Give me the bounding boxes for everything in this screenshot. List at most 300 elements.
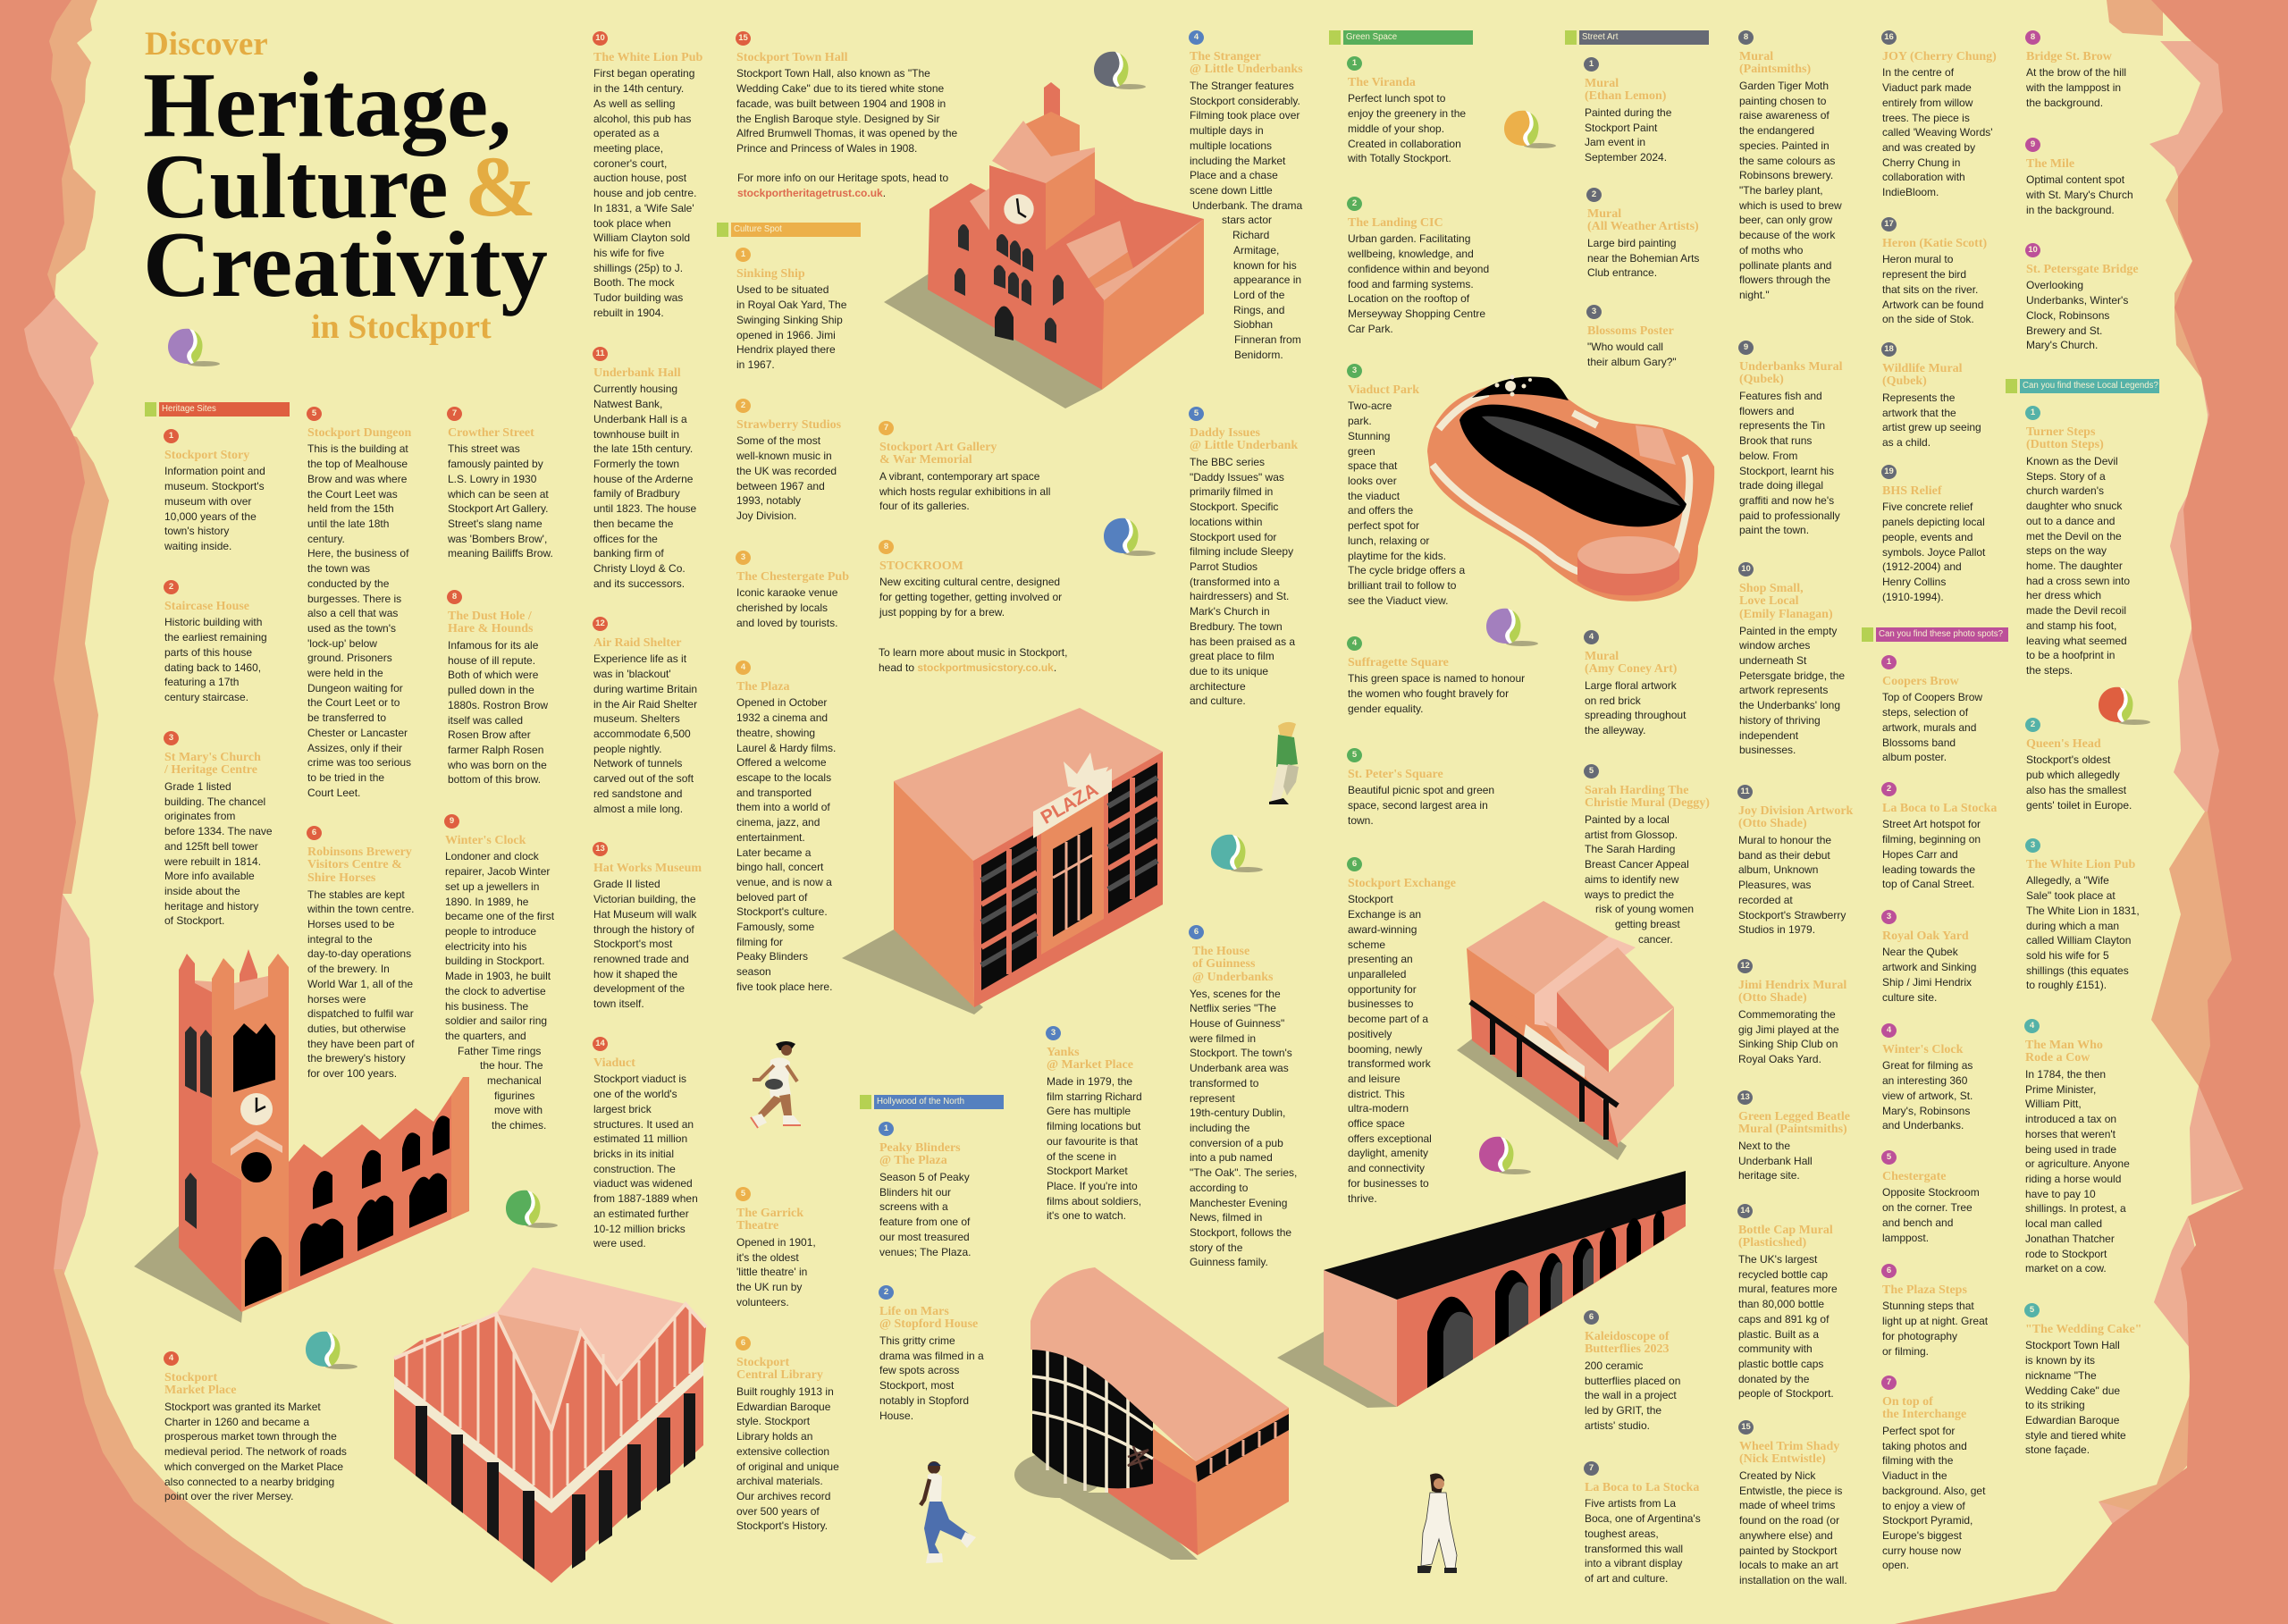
entry: Winter's Clock photo spot: Great for filming as (1882, 1059, 1973, 1072)
section heading: Culture Spot: Culture Spot (734, 224, 782, 234)
entry: Stockport Exchange: positively (1348, 1028, 1392, 1040)
entry: Mural All Weather Artists: 2 (1592, 189, 1596, 199)
entry: St. Petersgate Bridge: Overlooking (2026, 279, 2083, 291)
entry: Mural Paintsmiths: beer, can only grow (1739, 214, 1832, 226)
entry: Winter's Clock photo spot: view of artwork, St. (1882, 1090, 1973, 1102)
entry: The Man Who Rode a Cow: have to pay 10 (2025, 1188, 2096, 1200)
illustration: Stockport Exchange (1457, 901, 1674, 1160)
entry: Green Legged Beatle Mural (1738, 1090, 1850, 1183)
note: heritage link: For more info on our Heritage spots, head to (737, 172, 948, 184)
entry: Sarah Harding mural: Christie Mural (Deggy) (1585, 796, 1710, 810)
entry: The Landing CIC: Location on the rooftop of (1348, 292, 1469, 305)
entry: Stockport Town Hall (736, 31, 957, 155)
entry: Stockport Market Place: 4 (169, 1353, 173, 1363)
entry: Stockport Exchange: and leisure (1348, 1073, 1401, 1085)
entry: The Plaza: Opened in October (736, 696, 827, 709)
entry: Daddy Issues: 5 (1194, 408, 1199, 418)
entry: Viaduct: an estimated further (593, 1207, 689, 1220)
entry: On top of the Interchange: taking photos and (1882, 1440, 1967, 1452)
entry: Shop Small Love Local: Painted in the empty (1739, 625, 1837, 637)
entry: The Chestergate Pub (736, 551, 849, 629)
entry: Stockport Central Library: Built roughly 1913 in (736, 1385, 834, 1398)
entry: Joy Division Artwork (1738, 785, 1853, 938)
entry: The Mile: with St. Mary's Church (2026, 189, 2133, 201)
entry: JOY Cherry Chung: and was created by (1882, 141, 1975, 154)
entry: Stockport Market Place: also connected to a nearby bridging (164, 1476, 334, 1488)
entry: Air Raid Shelter: in the Air Raid Shelter (593, 698, 697, 711)
entry: Suffragette Square: the women who fought bravely for (1348, 687, 1509, 700)
entry: The Plaza Steps: The Plaza Steps (1882, 1283, 1967, 1296)
entry: Air Raid Shelter: carved out of the soft (593, 772, 694, 785)
entry: Mural Paintsmiths: flowers through the (1739, 273, 1830, 286)
entry: Underbank Hall: family of Bradbury (593, 487, 680, 500)
entry: The Garrick Theatre (736, 1187, 816, 1308)
entry: Stockport Exchange: scheme (1348, 938, 1385, 951)
entry: The White Lion Pub legend (2026, 838, 2140, 993)
entry: Daddy Issues: architecture (1190, 680, 1246, 693)
entry: Stockport Town Hall: the English Baroque style. Designed by Sir (736, 113, 939, 125)
entry: Stockport Dungeon: until the late 18th (307, 517, 389, 530)
entry: Chestergate: Opposite Stockroom (1882, 1186, 1980, 1199)
note: music link: head to stockportmusicstory.co.uk. (879, 661, 1056, 674)
entry: Daddy Issues: @ Little Underbank (1190, 439, 1298, 452)
entry: La Boca to La Stocka photo spot: leading towards the (1882, 863, 1975, 876)
entry: Stockport Exchange: businesses to (1348, 997, 1413, 1010)
entry: Wheel Trim Shady: 15 (1741, 1422, 1751, 1432)
entry: Joy Division Artwork: Studios in 1979. (1738, 923, 1815, 936)
entry: Stockport Central Library: over 500 years of (736, 1505, 820, 1518)
entry: Wildlife Mural: artwork that the (1882, 407, 1956, 419)
entry: Green Legged Beatle Mural: heritage site. (1738, 1169, 1800, 1182)
entry: The Stranger: stars actor (1222, 214, 1272, 226)
entry: The Chestergate Pub: cherished by locals (736, 602, 828, 614)
entry: Winter's Clock: became one of the first (445, 910, 554, 922)
entry: Yanks: it's one to watch. (1047, 1209, 1126, 1222)
entry: Stockport Exchange: presenting an (1348, 953, 1413, 965)
entry: Stockport Story: 10,000 years of the (164, 510, 257, 523)
entry: Stockport Central Library: Our archives record (736, 1490, 830, 1502)
entry: Winter's Clock: set up a jewellers in (445, 880, 539, 893)
entry: Viaduct Park (1347, 364, 1466, 607)
entry: Bottle Cap Mural: 14 (1740, 1206, 1750, 1216)
entry: Mural Paintsmiths: of moths who (1739, 244, 1803, 257)
entry: Mural Ethan Lemon: Stockport Paint (1585, 122, 1657, 134)
entry: Yanks: 3 (1051, 1028, 1056, 1038)
entry: Robinsons Brewery: World War 1, all of the (307, 978, 413, 990)
entry: Sarah Harding mural: Sarah Harding The (1585, 783, 1688, 797)
icon: magenta logo blob (1479, 1137, 1531, 1174)
entry: Mural Ethan Lemon: (Ethan Lemon) (1585, 89, 1666, 103)
entry: Strawberry Studios: Joy Division. (736, 509, 796, 522)
entry: St. Petersgate Bridge: St. Petersgate Bridge (2026, 263, 2139, 275)
title line: Creativity: Creativity (143, 212, 548, 316)
entry: Stockport Town Hall: 15 (738, 33, 748, 43)
entry: Winter's Clock: figurines (494, 1090, 534, 1102)
section heading: Green Space: Green Space (1346, 32, 1397, 42)
entry: Air Raid Shelter: was in 'blackout' (593, 668, 671, 680)
entry: Underbank Hall: until 1823. The house (593, 502, 696, 515)
entry: Viaduct Park: Stunning (1348, 430, 1390, 442)
entry: The House of Guinness: Stockport, follows the (1190, 1226, 1291, 1239)
entry: The Mile: in the background. (2026, 204, 2115, 216)
entry: Wheel Trim Shady: made of wheel trims (1739, 1499, 1835, 1511)
entry: Sinking Ship (736, 248, 846, 371)
entry: Viaduct (593, 1037, 698, 1250)
entry: STOCKROOM: New exciting cultural centre, designed (879, 576, 1060, 588)
entry: The Viranda: with Totally Stockport. (1348, 152, 1451, 164)
eyebrow: Discover: Discover (145, 26, 268, 63)
entry: The Wedding Cake (2025, 1303, 2141, 1458)
entry: Underbanks Mural (1739, 341, 1843, 538)
entry: The Plaza Steps: or filming. (1882, 1345, 1929, 1358)
entry: Viaduct Park: 3 (1352, 366, 1357, 375)
entry: JOY Cherry Chung: trees. The piece is (1882, 112, 1970, 124)
entry: Life on Mars: House. (879, 1409, 913, 1422)
entry: Crowther Street: meaning Bailiffs Brow. (448, 547, 553, 560)
entry: Sarah Harding mural: cancer. (1638, 933, 1673, 946)
entry: Coopers Brow: album poster. (1882, 751, 1947, 763)
entry: Mural Amy Coney Art: the alleyway. (1585, 724, 1645, 736)
entry: The White Lion Pub: 10 (595, 33, 605, 43)
entry: Shop Small Love Local: window arches (1739, 639, 1810, 652)
entry: Coopers Brow: Blossoms band (1882, 736, 1956, 749)
entry: The White Lion Pub (593, 31, 702, 319)
entry: On top of the Interchange: background. Also, get (1882, 1485, 1985, 1497)
entry: JOY Cherry Chung: IndieBloom. (1882, 186, 1939, 198)
entry: The White Lion Pub: First began operating (593, 67, 694, 80)
entry: Viaduct Park: Viaduct Park (1348, 383, 1419, 397)
entry: The Plaza: entertainment. (736, 831, 805, 844)
entry: La Boca to La Stocka photo spot (1882, 782, 1997, 892)
entry: Underbanks Mural: flowers and (1739, 405, 1794, 417)
entry: The Man Who Rode a Cow: Rode a Cow (2025, 1051, 2090, 1064)
entry: Daddy Issues: Stockport. Specific (1190, 501, 1278, 513)
entry: The Plaza: and transported (736, 787, 812, 799)
entry: Suffragette Square: gender equality. (1348, 703, 1424, 715)
entry: Shop Small Love Local: (Emily Flanagan) (1739, 608, 1833, 621)
entry: The Man Who Rode a Cow: William Pitt, (2025, 1098, 2082, 1110)
section heading: Hollywood of the North (860, 1095, 1004, 1109)
entry: The Stranger: scene down Little (1190, 184, 1273, 197)
illustration: market hall (394, 1267, 706, 1583)
entry: Chestergate: on the corner. Tree (1882, 1201, 1973, 1214)
entry: Crowther Street: famously painted by (448, 458, 543, 470)
entry: On top of the Interchange: On top of (1882, 1394, 1933, 1409)
entry: Yanks: @ Market Place (1047, 1058, 1133, 1072)
entry: Turner Steps: Steps. Story of a (2026, 470, 2106, 483)
entry: La Boca to La Stocka: of art and culture. (1585, 1572, 1668, 1585)
entry: St Mary's Church: 3 (169, 733, 173, 743)
entry: The Wedding Cake: style and tiered white (2025, 1429, 2126, 1442)
entry: The Stranger: Armitage, (1233, 244, 1279, 257)
entry: Heron Katie Scott: represent the bird (1882, 268, 1966, 281)
entry: Sinking Ship: 1 (741, 249, 745, 259)
entry: Robinsons Brewery: the brewery's history (307, 1052, 406, 1064)
entry: The Chestergate Pub: Iconic karaoke venue (736, 586, 837, 599)
entry: Robinsons Brewery: Robinsons Brewery (307, 846, 412, 858)
entry: The Stranger: Lord of the (1233, 289, 1284, 301)
entry: Daddy Issues: locations within (1190, 516, 1262, 528)
entry: The Viranda: 1 (1352, 58, 1357, 68)
entry: Stockport Exchange (1348, 857, 1456, 1206)
entry: Joy Division Artwork: Pleasures, was (1738, 879, 1811, 891)
entry: The Man Who Rode a Cow: being used in trade (2025, 1143, 2116, 1156)
entry: Turner Steps: her dress which (2026, 589, 2101, 602)
entry: Viaduct: bricks in its initial (593, 1148, 674, 1160)
entry: Viaduct Park: playtime for the kids. (1348, 550, 1446, 562)
entry: The Dust Hole: itself was called (448, 714, 523, 727)
entry: St. Petersgate Bridge: Underbanks, Winter's (2026, 294, 2128, 307)
entry: Mural Paintsmiths: because of the work (1739, 229, 1835, 241)
entry: Mural Amy Coney Art: on red brick (1585, 694, 1641, 707)
entry: Stockport Town Hall: Alfred Brumwell Thomas, it was opened by the (736, 127, 957, 139)
entry: The Stranger: Rings, and (1233, 304, 1284, 316)
entry: Shop Small Love Local: 10 (1741, 564, 1751, 574)
entry: Mural Paintsmiths: species. Painted in (1739, 139, 1830, 152)
entry: Stockport Central Library (736, 1336, 839, 1532)
entry: Sinking Ship: opened in 1966. Jimi (736, 329, 836, 341)
ampersand: & (465, 139, 536, 234)
entry: Bottle Cap Mural: plastic. Built as a (1738, 1328, 1819, 1341)
entry: The White Lion Pub legend: The White Lion Pub (2026, 858, 2135, 871)
illustration: interchange building (1014, 1267, 1289, 1560)
entry: Royal Oak Yard: Royal Oak Yard (1882, 930, 1969, 942)
entry: Underbanks Mural: Underbanks Mural (1739, 359, 1843, 374)
entry: Sinking Ship: Hendrix played there (736, 343, 836, 356)
entry: The Stranger: 4 (1194, 32, 1199, 42)
entry: Hat Works Museum: how it shaped the (593, 968, 677, 980)
entry: Coopers Brow: Coopers Brow (1882, 674, 1959, 688)
entry: Stockport Story: 1 (169, 431, 173, 441)
entry: The Viranda: middle of your shop. (1348, 122, 1444, 135)
entry: Heron Katie Scott (1882, 217, 1987, 327)
entry: The House of Guinness: transformed to (1190, 1077, 1258, 1090)
entry: Jimi Hendrix Mural: Jimi Hendrix Mural (1738, 978, 1846, 992)
entry: The White Lion Pub legend: Sale" took place at (2026, 889, 2116, 902)
entry: Wildlife Mural: 18 (1884, 344, 1894, 354)
entry: Shop Small Love Local: independent (1739, 729, 1798, 742)
entry: Underbank Hall: 11 (595, 349, 605, 358)
entry: The House of Guinness (1189, 925, 1297, 1268)
entry: Mural All Weather Artists (1587, 188, 1699, 281)
entry: Life on Mars: 2 (884, 1287, 888, 1297)
entry: Stockport Story: waiting inside. (164, 540, 231, 552)
entry: The Wedding Cake: Wedding Cake" due (2025, 1384, 2120, 1397)
entry: Staircase House: Staircase House (164, 599, 249, 613)
entry: Underbanks Mural: graffiti and now he's (1739, 494, 1834, 507)
entry: Joy Division Artwork: Stockport's Strawberry (1738, 909, 1846, 921)
entry: The Man Who Rode a Cow: riding a horse would (2025, 1173, 2121, 1185)
entry: Daddy Issues: Bredbury. The town (1190, 620, 1283, 633)
entry: Underbanks Mural: 9 (1744, 342, 1748, 352)
entry: Coopers Brow: 1 (1887, 657, 1891, 667)
entry: Mural Paintsmiths: night." (1739, 289, 1770, 301)
entry: Robinsons Brewery: integral to the (307, 933, 373, 946)
entry: Viaduct: from 1887-1889 when (593, 1192, 698, 1205)
entry: The Plaza: Later became a (736, 846, 811, 859)
entry: Mural Amy Coney Art: spreading throughout (1585, 709, 1686, 721)
entry: The Landing CIC: confidence within and beyond (1348, 263, 1489, 275)
entry: The Landing CIC: Urban garden. Facilitating (1348, 232, 1470, 245)
entry: Mural All Weather Artists: (All Weather Artists) (1587, 220, 1699, 233)
entry: The Dust Hole: farmer Ralph Rosen (448, 744, 543, 756)
entry: Stockport Story (164, 429, 265, 552)
entry: The Wedding Cake: "The Wedding Cake" (2025, 1323, 2141, 1335)
entry: Viaduct Park: see the Viaduct view. (1348, 594, 1449, 607)
entry: Viaduct Park: brilliant trail to follow to (1348, 579, 1456, 592)
entry: Stockport Market Place: Stockport (164, 1371, 217, 1384)
entry: The Stranger: Place and a chase (1190, 169, 1278, 181)
entry: St. Peter's Square: Beautiful picnic spot and green (1348, 784, 1494, 796)
entry: Mural Ethan Lemon (1585, 57, 1671, 165)
entry: The Stranger: multiple locations (1190, 139, 1272, 152)
figure: woman in green hoodie (1269, 722, 1299, 804)
entry: St Mary's Church: of Stockport. (164, 914, 224, 927)
entry: Stockport Market Place: which converged on the Market Place (164, 1460, 343, 1473)
entry: Turner Steps: Turner Steps (2026, 425, 2095, 438)
entry: Wildlife Mural: (Qubek) (1882, 374, 1927, 388)
entry: Queen's Head: also has the smallest (2026, 784, 2126, 796)
entry: St. Petersgate Bridge (2026, 243, 2139, 353)
entry: St. Peter's Square (1348, 748, 1494, 829)
entry: Hat Works Museum: Hat Museum will walk (593, 908, 696, 921)
entry: Stockport Dungeon (307, 407, 411, 799)
section heading: Green Space (1329, 30, 1473, 45)
entry: Peaky Blinders: our most treasured (879, 1231, 970, 1243)
entry: Underbanks Mural: Features fish and (1739, 390, 1822, 402)
entry: Winter's Clock: 1890. In 1989, he (445, 896, 528, 908)
entry: Sarah Harding mural: Breast Cancer Appeal (1585, 858, 1689, 871)
entry: Robinsons Brewery: duties, but otherwise (307, 1022, 406, 1035)
entry: Underbank Hall: Currently housing (593, 383, 677, 395)
icon: teal logo blob 2 (1211, 835, 1263, 872)
entry: The Plaza: season (736, 965, 771, 978)
entry: The House of Guinness: according to (1190, 1182, 1248, 1194)
entry: The White Lion Pub legend: during which a man (2026, 920, 2119, 932)
section heading: Street Art: Street Art (1582, 32, 1618, 42)
entry: Suffragette Square: This green space is named to honour (1348, 672, 1525, 685)
entry: The Dust Hole (447, 590, 548, 786)
entry: JOY Cherry Chung: collaboration with (1882, 171, 1965, 183)
entry: Yanks: Stockport Market (1047, 1165, 1128, 1177)
entry: Winter's Clock: move with (494, 1104, 543, 1116)
entry: Suffragette Square: 4 (1352, 638, 1357, 648)
entry: Green Legged Beatle Mural: Green Legged Beatle (1738, 1110, 1850, 1123)
entry: St. Petersgate Bridge: 10 (2028, 245, 2038, 255)
entry: Winter's Clock (444, 814, 554, 1132)
entry: Yanks: our favourite is that (1047, 1135, 1138, 1148)
entry: Crowther Street (447, 407, 553, 560)
entry: Air Raid Shelter: accommodate 6,500 (593, 728, 691, 740)
entry: The Man Who Rode a Cow: horses that weren't (2025, 1128, 2116, 1140)
entry: Crowther Street: was 'Bombers Brow', (448, 533, 547, 545)
entry: Mural Paintsmiths: pollinate plants and (1739, 259, 1831, 272)
entry: Viaduct Park: park. (1348, 415, 1372, 427)
entry: Viaduct: viaduct was widened (593, 1177, 693, 1190)
entry: Chestergate (1882, 1150, 1980, 1245)
section heading: Heritage Sites (145, 402, 290, 417)
entry: Wheel Trim Shady: painted by Stockport (1739, 1544, 1837, 1557)
entry: Queen's Head: 2 (2031, 719, 2035, 729)
entry: Bottle Cap Mural: Bottle Cap Mural (1738, 1223, 1833, 1237)
subtitle: in Stockport: in Stockport (311, 308, 492, 346)
entry: Turner Steps: 1 (2031, 408, 2035, 417)
entry: The Plaza: theatre, showing (736, 727, 815, 739)
icon: grey logo blob (1094, 52, 1146, 89)
entry: Heron Katie Scott: Heron (Katie Scott) (1882, 236, 1987, 250)
entry: Mural Paintsmiths: which is used to brew (1739, 199, 1842, 212)
entry: Chestergate: and bench and (1882, 1216, 1953, 1229)
entry: Stockport Dungeon: were held in the (307, 667, 383, 679)
entry: Mural Paintsmiths: Mural (1739, 50, 1773, 63)
entry: Underbank Hall: townhouse built in (593, 428, 679, 441)
entry: Underbank Hall: the late 15th century. (593, 442, 693, 455)
entry: The House of Guinness: into a pub named (1190, 1151, 1273, 1164)
entry: Stockport Exchange: Exchange is an (1348, 908, 1421, 921)
entry: Stockport Dungeon: Dungeon waiting for (307, 682, 403, 694)
entry: The Landing CIC: Merseyway Shopping Centre (1348, 307, 1485, 320)
entry: The House of Guinness: of Guinness (1192, 957, 1255, 971)
entry: The Landing CIC: The Landing CIC (1348, 216, 1443, 229)
entry: The Man Who Rode a Cow: Prime Minister, (2025, 1083, 2096, 1096)
figure: woman in white suit (1417, 1473, 1457, 1573)
entry: Wildlife Mural: Wildlife Mural (1882, 361, 1963, 375)
entry: On top of the Interchange: curry house now (1882, 1544, 1961, 1557)
entry: The Viranda (1347, 56, 1466, 164)
entry: Air Raid Shelter: Network of tunnels (593, 757, 682, 770)
entry: Kaleidoscope of Butterflies: the wall in a project (1585, 1389, 1677, 1401)
entry: Turner Steps: (Dutton Steps) (2026, 438, 2104, 451)
entry: Shop Small Love Local: Shop Small, (1739, 581, 1804, 595)
entry: Robinsons Brewery: Horses used to be (307, 918, 394, 930)
entry: Kaleidoscope of Butterflies: butterflies placed on (1585, 1375, 1680, 1387)
entry: Kaleidoscope of Butterflies: 6 (1589, 1312, 1594, 1322)
entry: Daddy Issues: has been praised as a (1190, 635, 1295, 648)
entry: Turner Steps: Known as the Devil (2026, 455, 2118, 467)
entry: The Dust Hole: pulled down in the (448, 684, 534, 696)
entry: The Stranger: known for his (1233, 259, 1297, 272)
entry: BHS Relief: 19 (1884, 467, 1894, 476)
entry: Shop Small Love Local: Petersgate bridge, the (1739, 669, 1845, 682)
entry: Strawberry Studios: well-known music in (736, 450, 832, 462)
entry: Stockport Dungeon: 'lock-up' below (307, 637, 377, 650)
entry: The Stranger: The Stranger (1190, 50, 1261, 63)
entry: The House of Guinness: @ Underbanks (1192, 971, 1273, 984)
entry: Staircase House: featuring a 17th (164, 676, 239, 688)
section heading: photo spots (1862, 627, 2008, 642)
entry: The House of Guinness: including the (1190, 1122, 1249, 1134)
entry: The Plaza: 1932 a cinema and (736, 711, 828, 724)
entry: Suffragette Square (1347, 636, 1525, 715)
entry: The House of Guinness: 6 (1194, 927, 1199, 937)
entry: Sarah Harding mural: getting breast (1615, 918, 1680, 930)
entry: The Stranger: Filming took place over (1190, 109, 1300, 122)
entry: The Garrick Theatre: 5 (741, 1189, 745, 1199)
entry: The Stranger: Siobhan (1233, 318, 1273, 331)
entry: Stockport Market Place: medieval period. The network of roads (164, 1445, 347, 1458)
illustration: the Plaza: PLAZA (1038, 779, 1102, 829)
entry: The White Lion Pub: William Clayton sold (593, 231, 690, 244)
entry: BHS Relief: BHS Relief (1882, 484, 1941, 497)
entry: Robinsons Brewery: 6 (312, 828, 316, 837)
entry: Stockport Exchange: and connectivity (1348, 1162, 1425, 1174)
entry: On top of the Interchange: open. (1882, 1559, 1909, 1571)
entry: Viaduct Park: and offers the (1348, 504, 1413, 517)
entry: Jimi Hendrix Mural: (Otto Shade) (1738, 991, 1807, 1005)
entry: Hat Works Museum: through the history of (593, 923, 694, 936)
entry: Air Raid Shelter: during wartime Britain (593, 683, 697, 695)
entry: La Boca to La Stocka: 7 (1589, 1463, 1594, 1473)
